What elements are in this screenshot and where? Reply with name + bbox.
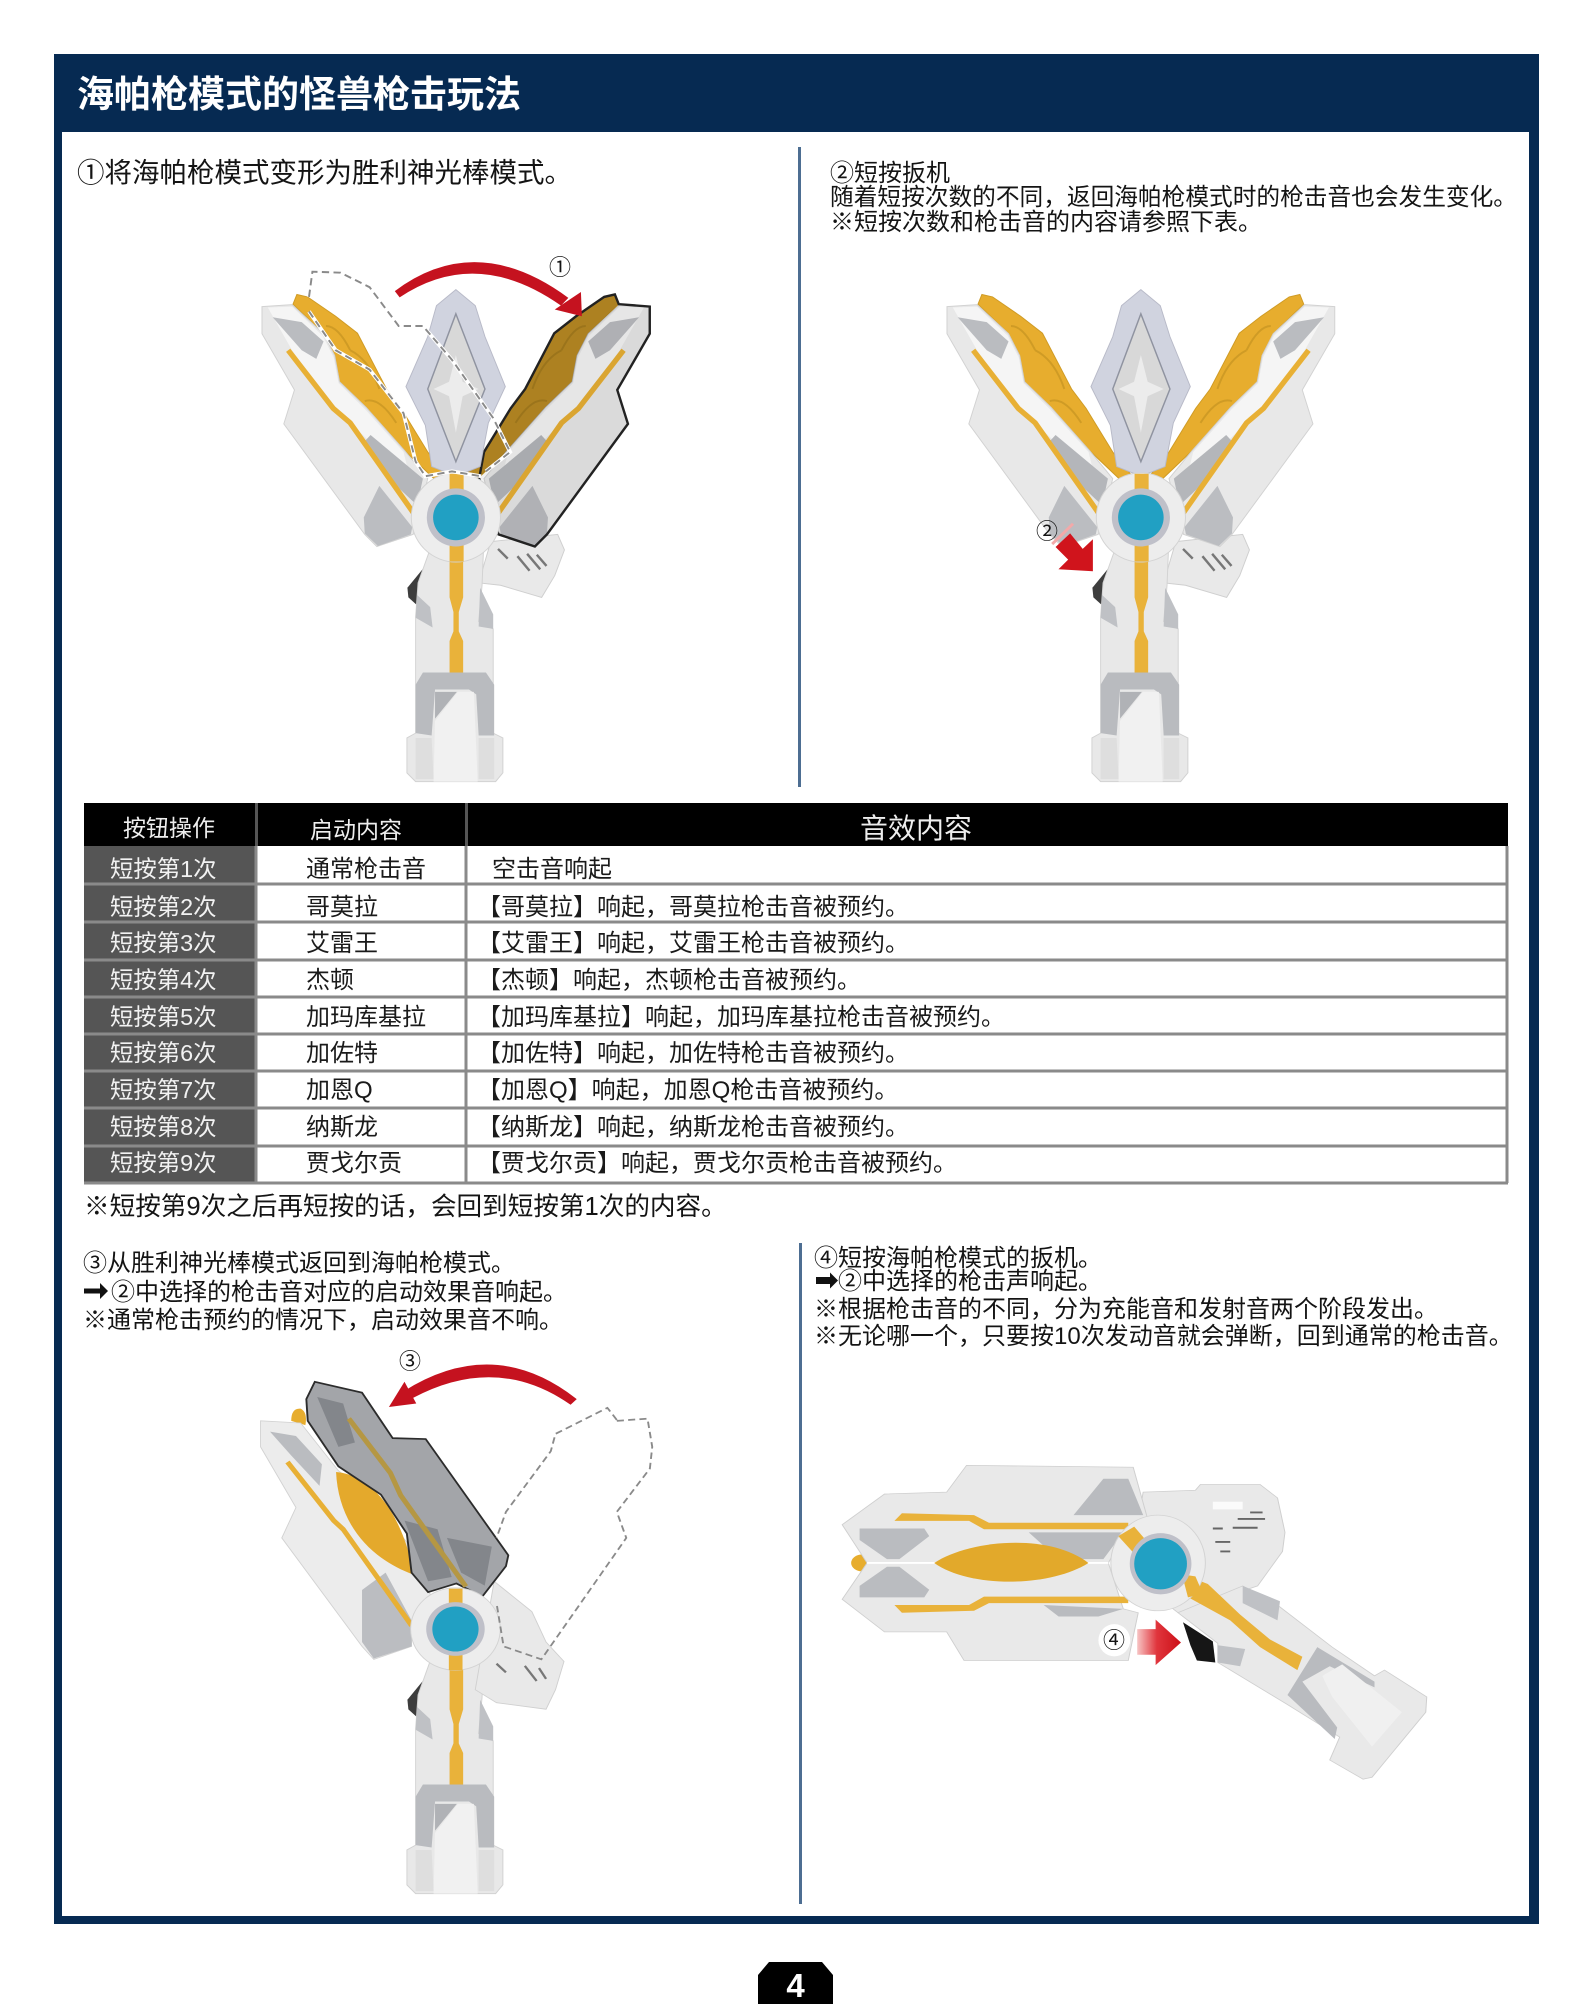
row 9: 贾戈尔贡 bbox=[306, 1150, 402, 1177]
row 2: 短按第2次 bbox=[110, 894, 217, 920]
right frame edge bbox=[1529, 54, 1539, 1924]
row 5: 加玛库基拉 bbox=[306, 1004, 426, 1031]
row 4: 短按第4次 bbox=[110, 967, 217, 993]
vertical divider top bbox=[798, 147, 801, 787]
row 9: 短按第9次 bbox=[110, 1150, 217, 1176]
step label: circled 2: ② bbox=[1036, 519, 1058, 544]
page number tab bbox=[758, 1962, 833, 2004]
step label: circled 1: ① bbox=[549, 255, 571, 280]
title banner bbox=[54, 54, 1539, 132]
row 6: 短按第6次 bbox=[110, 1040, 217, 1066]
row 6: 加佐特 bbox=[306, 1040, 378, 1067]
row 5: 【加玛库基拉】响起，加玛库基拉枪击音被预约。 bbox=[477, 1004, 1005, 1031]
row 4: 杰顿 bbox=[306, 967, 354, 994]
row 8: 纳斯龙 bbox=[306, 1114, 378, 1141]
illustration: step 3 gun with wing closing bbox=[261, 1365, 652, 1894]
step label: circled 4: ④ bbox=[1103, 1628, 1125, 1653]
row 2 bbox=[110, 894, 909, 921]
table grid bbox=[84, 846, 1508, 1184]
row 9 bbox=[110, 1150, 957, 1177]
row 9: 【贾戈尔贡】响起，贾戈尔贡枪击音被预约。 bbox=[477, 1150, 957, 1177]
step 4 instruction: ②中选择的枪击声响起。 bbox=[838, 1268, 1102, 1295]
step 4 instruction: ※无论哪一个，只要按10次发动音就会弹断，回到通常的枪击音。 bbox=[814, 1323, 1513, 1350]
row 2: 哥莫拉 bbox=[306, 894, 378, 921]
step 2 instruction bbox=[830, 160, 1517, 236]
row 7 bbox=[110, 1077, 898, 1104]
step 3 instruction bbox=[83, 1250, 567, 1334]
row 5: 短按第5次 bbox=[110, 1004, 217, 1030]
row 3 bbox=[110, 930, 909, 957]
row 1: 通常枪击音 bbox=[306, 856, 426, 883]
step 3 instruction: ※通常枪击预约的情况下，启动效果音不响。 bbox=[83, 1307, 563, 1334]
step 1 instruction: ①将海帕枪模式变形为胜利神光棒模式。 bbox=[77, 157, 572, 188]
row 1 bbox=[110, 856, 612, 883]
page number tab: 4 bbox=[786, 1967, 805, 2004]
icon: arrow bbox=[84, 1283, 108, 1299]
row 8: 短按第8次 bbox=[110, 1114, 217, 1140]
vertical divider bottom bbox=[799, 1243, 802, 1904]
illustration: step 2 gun with trigger arrow bbox=[947, 290, 1335, 782]
step 4 instruction: ※根据枪击音的不同，分为充能音和发射音两个阶段发出。 bbox=[814, 1296, 1438, 1323]
title banner: 海帕枪模式的怪兽枪击玩法 bbox=[77, 74, 521, 115]
row 4: 【杰顿】响起，杰顿枪击音被预约。 bbox=[477, 967, 861, 994]
table header: 音效内容 bbox=[860, 813, 972, 844]
row 6: 【加佐特】响起，加佐特枪击音被预约。 bbox=[477, 1040, 909, 1067]
table footnote: ※短按第9次之后再短按的话，会回到短按第1次的内容。 bbox=[84, 1192, 727, 1221]
row 3: 短按第3次 bbox=[110, 930, 217, 956]
step 3 instruction: ②中选择的枪击音对应的启动效果音响起。 bbox=[111, 1279, 567, 1306]
step 2 instruction: ※短按次数和枪击音的内容请参照下表。 bbox=[830, 209, 1262, 236]
illustration: step 1 gun with wing opening bbox=[262, 262, 650, 782]
row 5 bbox=[110, 1004, 1005, 1031]
row 4 bbox=[110, 967, 861, 994]
row 7: 短按第7次 bbox=[110, 1077, 217, 1103]
row 3: 【艾雷王】响起，艾雷王枪击音被预约。 bbox=[477, 930, 909, 957]
row 3: 艾雷王 bbox=[306, 930, 378, 957]
step 4 instruction: ④短按海帕枪模式的扳机。 bbox=[814, 1245, 1102, 1272]
row 2: 【哥莫拉】响起，哥莫拉枪击音被预约。 bbox=[477, 894, 909, 921]
operation table bbox=[84, 803, 1508, 1184]
row 7: 加恩Q bbox=[306, 1077, 373, 1104]
row 8 bbox=[110, 1114, 909, 1141]
step label: circled 3: ③ bbox=[399, 1349, 421, 1374]
row 7: 【加恩Q】响起，加恩Q枪击音被预约。 bbox=[477, 1077, 898, 1104]
row 1: 短按第1次 bbox=[110, 856, 217, 882]
table header: 按钮操作 bbox=[123, 815, 215, 841]
row 8: 【纳斯龙】响起，纳斯龙枪击音被预约。 bbox=[477, 1114, 909, 1141]
step 2 instruction: 随着短按次数的不同，返回海帕枪模式时的枪击音也会发生变化。 bbox=[830, 184, 1517, 211]
table header: 启动内容 bbox=[310, 817, 402, 843]
row 6 bbox=[110, 1040, 909, 1067]
illustration: step 4 gun in horizontal mode bbox=[842, 1465, 1427, 1779]
step 3 instruction: ③从胜利神光棒模式返回到海帕枪模式。 bbox=[83, 1250, 515, 1277]
row 1: 空击音响起 bbox=[492, 856, 612, 883]
icon: arrow bbox=[816, 1272, 838, 1288]
step 4 instruction bbox=[814, 1245, 1513, 1350]
step 2 instruction: ②短按扳机 bbox=[830, 160, 950, 187]
table header bbox=[84, 803, 1508, 846]
